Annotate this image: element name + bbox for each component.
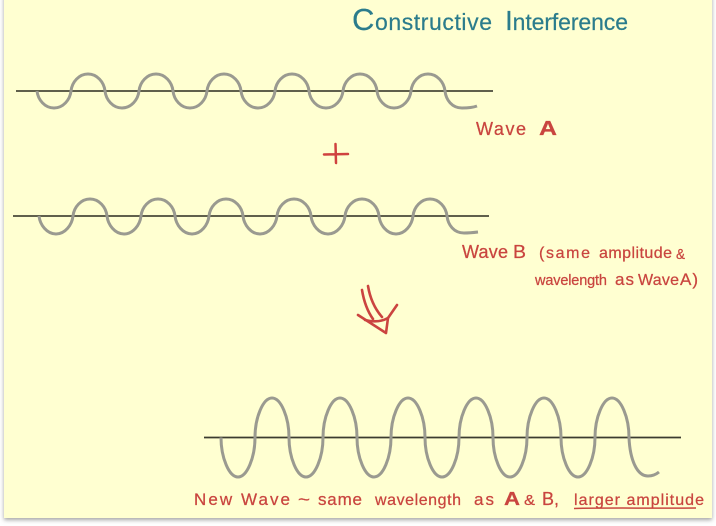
arrow: triple-line down right (358, 286, 397, 333)
label: wave B description: as (615, 270, 634, 289)
title: Constructive (352, 2, 492, 37)
wave A diagram (16, 74, 493, 108)
wave B diagram (13, 199, 489, 234)
label: new wave description: B, (542, 489, 559, 509)
label: wave B description: Wave (638, 272, 679, 289)
new wave curve (221, 398, 659, 477)
label: new wave description: same (318, 490, 362, 509)
wave A axis (16, 90, 493, 92)
label: wave B description: B (513, 242, 526, 262)
label: new wave description: ~ (298, 490, 310, 509)
label: wave A (476, 118, 557, 140)
label: new wave description: wavelength (374, 492, 461, 509)
label: new wave description: as (474, 490, 494, 509)
wave A curve (37, 74, 477, 108)
new wave axis (204, 436, 681, 438)
label: wave B description: (same (539, 245, 590, 262)
label: new wave description: larger amplitude (574, 492, 704, 509)
label: wave B description: A) (680, 270, 698, 289)
label: new wave description (194, 489, 704, 509)
plus sign (324, 144, 348, 163)
title: Interference (505, 5, 628, 36)
label: wave B description: & (676, 246, 685, 263)
label: wave B description: Wave (462, 242, 508, 262)
new wave diagram (204, 398, 681, 477)
label: wave A: Wave (476, 119, 526, 139)
label: wave A: A (539, 118, 557, 140)
title (352, 2, 628, 37)
wave B curve (39, 199, 478, 234)
wave B axis (13, 215, 489, 217)
underline: larger amplitude (574, 507, 696, 510)
label: wave B description (462, 242, 698, 289)
label: wave B description: amplitude (599, 245, 672, 262)
label: new wave description: & (524, 492, 535, 509)
label: new wave description: New Wave (194, 490, 290, 509)
label: wave B description: wavelength (534, 273, 607, 289)
label: new wave description: A (504, 489, 520, 509)
